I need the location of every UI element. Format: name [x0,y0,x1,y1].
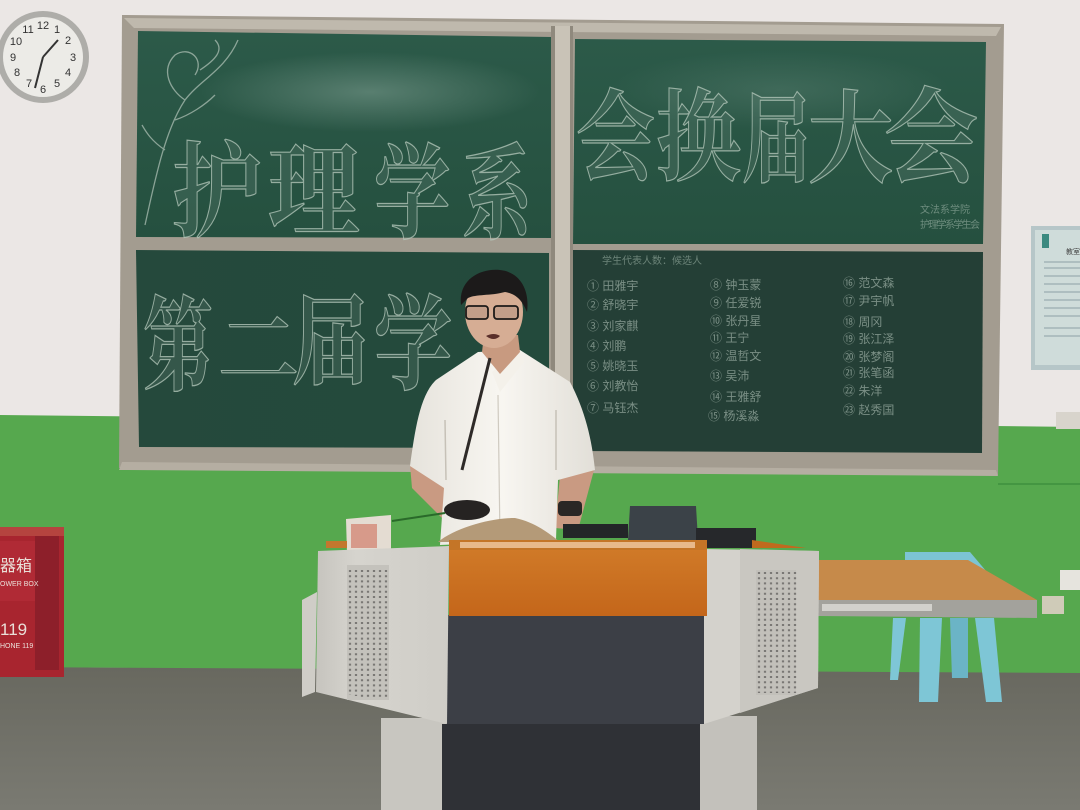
right wing [704,549,819,724]
board panel: bottom left [136,250,549,448]
head [461,270,528,374]
chalk title: 护理学系: 护 [172,108,262,258]
power outlets [1042,570,1080,614]
fire equipment box: 119 [0,620,27,639]
chalk title: 第二届学: 二 [218,286,299,402]
left wing [302,546,449,724]
candidate list: ⑰ 尹宇帆 [843,293,894,308]
lectern [302,540,819,810]
side table [818,560,1037,618]
wooden top [449,540,707,616]
blue stool [890,552,1002,702]
candidate list: ⑪ 王宁 [710,330,749,345]
chalk title: 会换届大会: 大 [808,58,894,203]
speaker [410,270,595,545]
wall clock: 9 [10,52,16,64]
vine doodle [142,40,238,225]
chalk title: 第二届学 [143,263,452,412]
candidate list: ㉒ 朱洋 [843,383,882,398]
candidate list: ⑤ 姚晓玉 [587,359,638,373]
chalk title: 会换届大会: 会 [576,58,655,201]
board panel: top left [136,31,553,238]
wall clock: 6 [40,84,46,96]
microphone [392,358,490,521]
wall clock: 1 [54,24,60,36]
cloth [438,518,560,542]
chalk note: organiser: 文法系学院 [920,203,970,216]
candidate list: ⑫ 温哲文 [710,348,761,363]
notice board on wall: 教室 [1066,247,1080,256]
candidate list: ⑦ 马钰杰 [587,401,638,415]
candidate list: ⑨ 任爱锐 [710,296,761,310]
candidate list: ⑬ 吴沛 [710,369,749,383]
dark front [446,615,704,724]
watch [558,501,582,516]
forearms [410,465,594,530]
wall clock: 12 [37,20,49,32]
candidate list: ① 田雅宇 [587,278,638,293]
lower base [381,716,757,810]
wall [0,0,1080,430]
candidate list: ⑭ 王雅舒 [710,389,761,404]
fire equipment box: 器箱 [0,557,32,575]
chalk title: 护理学系: 学 [374,112,451,261]
chalk title: 会换届大会: 会 [884,56,978,204]
desk equipment [563,506,756,548]
wall clock: 11 [22,24,34,36]
candidate list: ④ 刘鹏 [587,339,626,353]
candidate list: 学生代表人数：候选人 [602,254,702,267]
candidate list: ⑧ 钟玉蒙 [710,277,761,292]
candidate list: ② 舒晓宇 [587,298,638,312]
wood strips beside top [326,540,806,548]
chalk title: 护理学系: 系 [462,112,533,260]
candidate list: ⑩ 张丹星 [710,314,761,328]
chalk title: 会换届大会: 届 [742,61,809,203]
wall clock: 7 [26,78,32,90]
candidate list: ⑲ 张江泽 [843,332,894,346]
chalk title: 护理学系 [172,108,533,261]
wall clock: 3 [70,52,76,64]
green wainscot [0,415,1080,675]
wall clock: 10 [10,36,22,48]
centre frame post [551,26,573,462]
paper notice box [346,515,391,553]
wall socket [1056,412,1080,429]
chalk title: 第二届学: 第 [143,264,213,412]
notice board on wall [1031,226,1080,370]
chalk title: 第二届学: 学 [374,263,452,411]
candidate list: ㉓ 赵秀国 [843,403,894,417]
wall clock: 8 [14,67,20,79]
wall clock: 4 [65,67,71,79]
chalk note: organiser: 护理学系学生会 [920,218,980,231]
blackboard frame [119,15,1004,476]
candidate list: ③ 刘家麒 [587,318,638,333]
chalk title: 第二届学: 届 [292,263,368,405]
wall clock [0,11,89,103]
white shirt [410,350,595,545]
fire equipment box: HONE 119 [0,643,33,650]
chalk title: 会换届大会: 换 [656,60,742,201]
fire equipment box: OWER BOX [0,581,39,588]
chalk title: 护理学系: 理 [268,113,360,255]
wall clock: 2 [65,35,71,47]
candidate list: ⑥ 刘教怡 [587,378,638,393]
candidate list: ⑮ 杨溪淼 [708,408,759,423]
wall clock: 5 [54,78,60,90]
board panel: top right [573,39,986,244]
candidate list: ㉑ 张笔函 [843,365,894,380]
candidate list [587,254,894,423]
floor [0,667,1080,810]
chalk note: organiser [920,203,980,231]
fire equipment box [0,527,64,677]
candidate list: ⑯ 范文森 [843,275,894,290]
chalk title: 会换届大会 [576,56,978,204]
board panel: bottom right [572,250,983,453]
candidate list: ⑳ 张梦阁 [843,350,894,364]
candidate list: ⑱ 周冈 [843,315,882,329]
